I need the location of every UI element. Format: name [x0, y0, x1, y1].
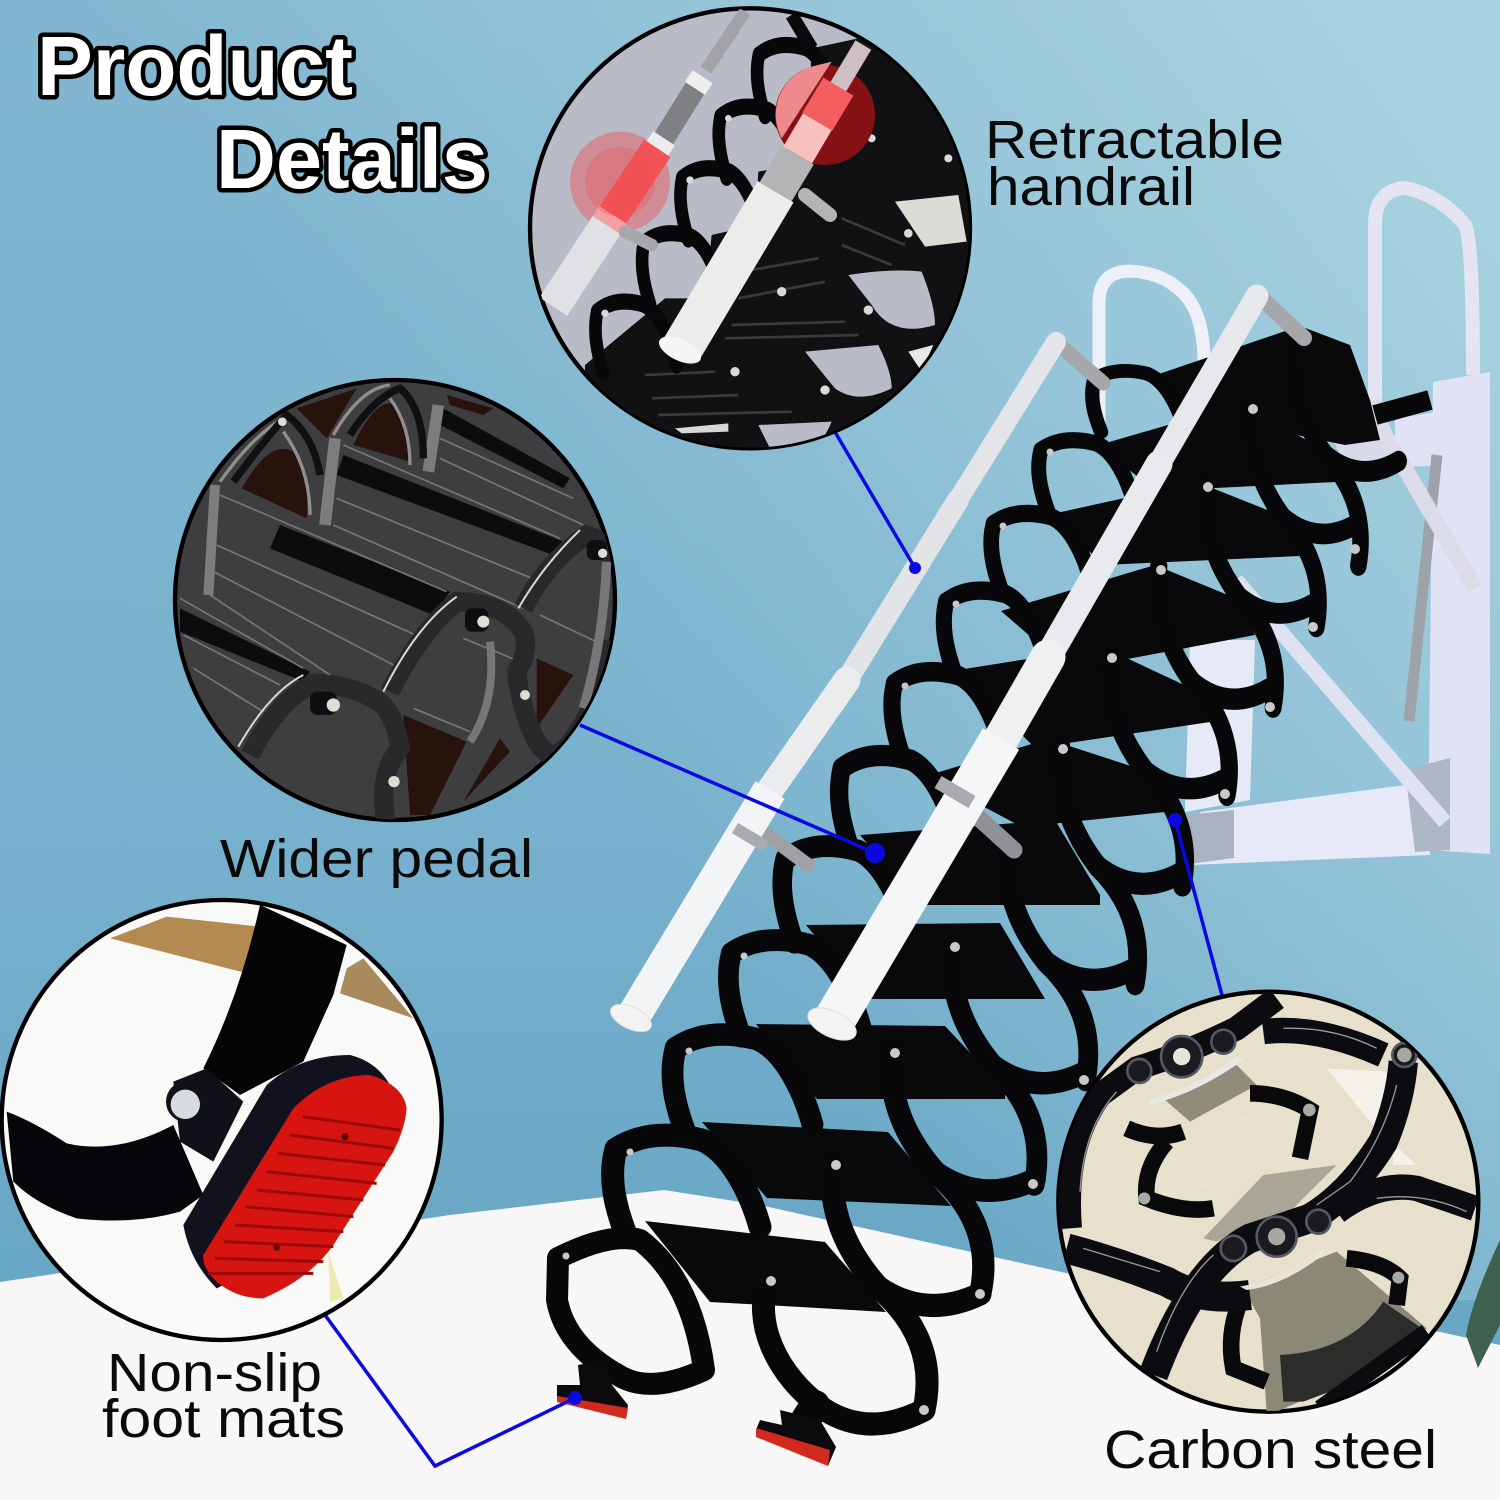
label: retractable handrail [985, 110, 1284, 217]
circle: non-slip foot mat detail [2, 900, 442, 1340]
callout dots [568, 562, 1182, 1405]
red highlight: right handrail joint [775, 65, 875, 165]
bracket link to wall plate [1375, 400, 1430, 415]
ladder pins [562, 404, 1360, 1415]
ladder right chain [763, 341, 1399, 1432]
label: wider pedal: Wider pedal [220, 829, 533, 889]
title [37, 19, 488, 206]
label: non-slip foot mats: foot mats [102, 1389, 345, 1449]
title: Product [37, 19, 353, 113]
label: retractable handrail: Retractable [985, 110, 1284, 170]
title: Details [216, 112, 488, 206]
ladder feet with red mats [557, 1360, 836, 1466]
plant leaf [1466, 1240, 1500, 1368]
right handrail [803, 294, 1304, 1047]
wall mount frame [1099, 188, 1490, 865]
label: non-slip foot mats: Non-slip [107, 1343, 322, 1403]
circle: wider pedal detail [175, 380, 615, 825]
label: carbon steel: Carbon steel [1104, 1420, 1437, 1480]
red highlight: left handrail joint [570, 132, 670, 232]
ladder left chain [557, 371, 1184, 1384]
label: non-slip foot mats [102, 1343, 345, 1449]
label: retractable handrail: handrail [987, 157, 1195, 217]
circle: retractable handrail detail [530, 8, 975, 455]
ladder steps [645, 326, 1380, 1312]
circle: carbon steel detail [1058, 992, 1478, 1412]
callout lines [325, 432, 1222, 1466]
floor [0, 1190, 1500, 1500]
left handrail [606, 342, 1103, 1037]
